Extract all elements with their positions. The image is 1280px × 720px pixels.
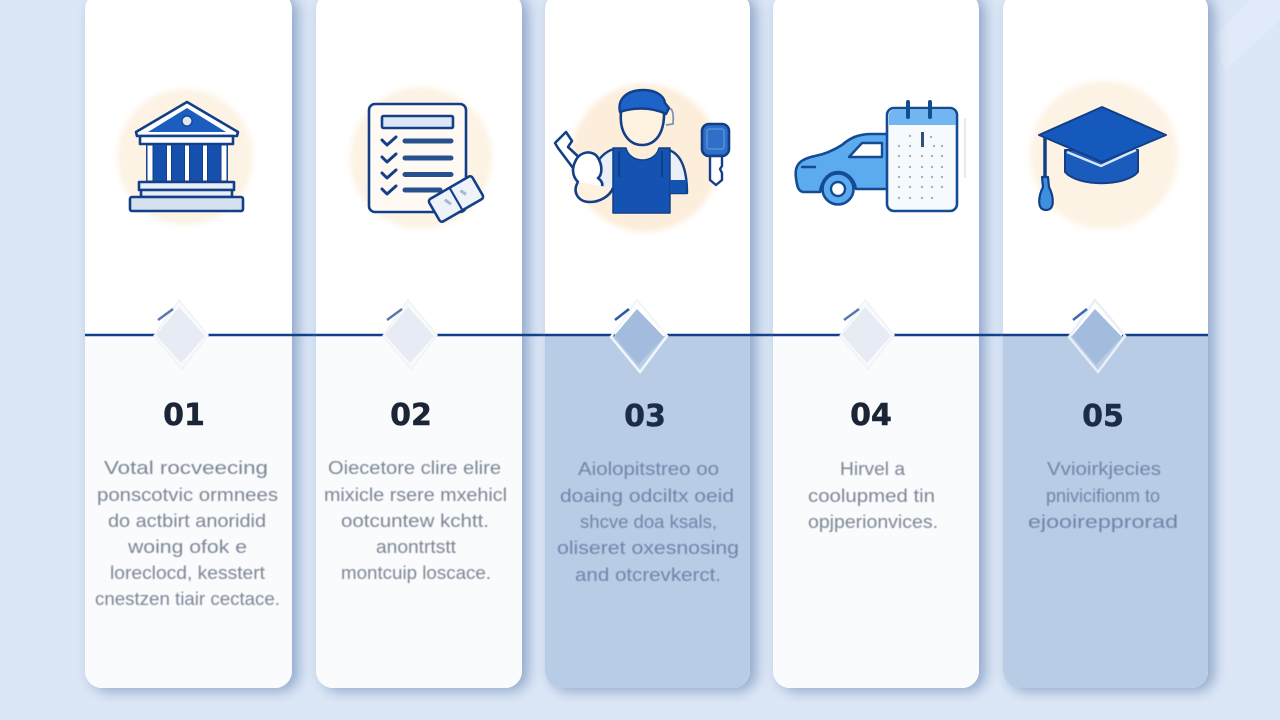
step number 01: 01 (163, 398, 205, 433)
step number 05: 05 (1082, 399, 1124, 434)
timeline segment (1003, 334, 1208, 336)
description text: ponscotvic ormnees (97, 485, 278, 505)
description text: coolupmed tin (808, 486, 935, 506)
description text: Oiecetore clire elire (328, 458, 501, 478)
timeline marker 5 (1069, 300, 1125, 372)
description text (808, 459, 938, 532)
description text: oliseret oxesnosing (557, 538, 739, 558)
icon: bank building (117, 89, 253, 225)
description text: ootcuntew kchtt. (341, 511, 489, 531)
description text (557, 459, 739, 585)
description text: Vvioirkjecies (1047, 459, 1161, 479)
description text: and otcrevkerct. (575, 565, 721, 585)
description text: loreclocd, kesstert (110, 563, 265, 583)
timeline segment (316, 334, 545, 336)
description text (1028, 459, 1178, 532)
timeline segment (85, 334, 316, 336)
description text: anontrtstt (376, 537, 456, 557)
timeline marker 3 (611, 300, 667, 372)
description text: shcve doa ksals, (580, 512, 717, 532)
description text: pnivicifionm to (1046, 486, 1160, 506)
timeline segment (773, 334, 1003, 336)
description text: Votal rocveecing (104, 458, 268, 478)
description text: doaing odciltx oeid (560, 486, 734, 506)
description text (324, 458, 507, 583)
icon: car and calendar (796, 102, 965, 211)
step number 04: 04 (850, 398, 892, 433)
description text: Aiolopitstreo oo (578, 459, 719, 479)
description text: montcuip loscace. (341, 563, 491, 583)
panel: step 2 (316, 0, 545, 688)
timeline marker 1 (154, 300, 208, 369)
description text: ejooirepprorad (1028, 512, 1178, 532)
timeline marker 2 (383, 300, 437, 369)
description text: do actbirt anoridid (108, 511, 266, 531)
panel: step 1 (85, 0, 316, 688)
description text: woing ofok e (127, 537, 247, 557)
timeline marker 4 (840, 300, 894, 369)
icon: mechanic with key (555, 84, 729, 232)
step number 03: 03 (624, 399, 666, 434)
description text: opjperionvices. (808, 512, 938, 532)
panel: step 5 (1003, 0, 1208, 688)
description text (95, 458, 280, 609)
icon: checklist with ticket (350, 87, 492, 229)
timeline segment (545, 334, 773, 336)
panel: step 4 (773, 0, 1003, 688)
description text: cnestzen tiair cectace. (95, 589, 280, 609)
icon: graduation cap (1030, 81, 1178, 229)
description text: mixicle rsere mxehicl (324, 485, 507, 505)
panel: step 3 (545, 0, 773, 688)
description text: Hirvel a (840, 459, 906, 479)
step number 02: 02 (390, 398, 432, 433)
